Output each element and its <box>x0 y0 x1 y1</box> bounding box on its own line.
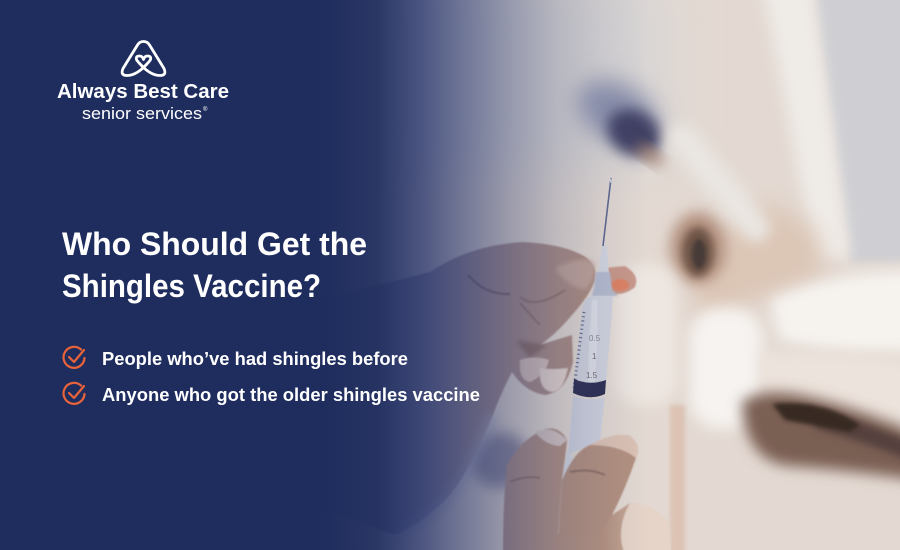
syringe scale: 1.5 <box>586 371 598 380</box>
title: Shingles Vaccine? <box>62 268 321 304</box>
syringe scale: 0.5 <box>589 334 601 343</box>
checklist <box>64 347 480 405</box>
logo <box>57 42 229 123</box>
title <box>62 226 367 304</box>
upper hand holding syringe <box>300 242 636 535</box>
lower hand fingers <box>503 428 671 550</box>
logo tagline: senior services <box>82 105 202 123</box>
logo icon: house and heart <box>122 42 165 76</box>
syringe scale: 1 <box>592 352 597 361</box>
item 2 <box>64 383 480 405</box>
registered mark: ® <box>203 106 208 113</box>
logo wordmark: Always Best Care <box>57 80 229 103</box>
icon: orange check circle <box>64 347 84 368</box>
syringe scale <box>586 334 601 380</box>
title: Who Should Get the <box>62 226 367 262</box>
icon: orange check circle <box>64 383 84 404</box>
text: item 2: Anyone who got the older shingles vaccine <box>102 384 480 405</box>
syringe <box>556 178 618 528</box>
text: item 1: People who’ve had shingles before <box>102 348 408 369</box>
item 1 <box>64 347 408 369</box>
